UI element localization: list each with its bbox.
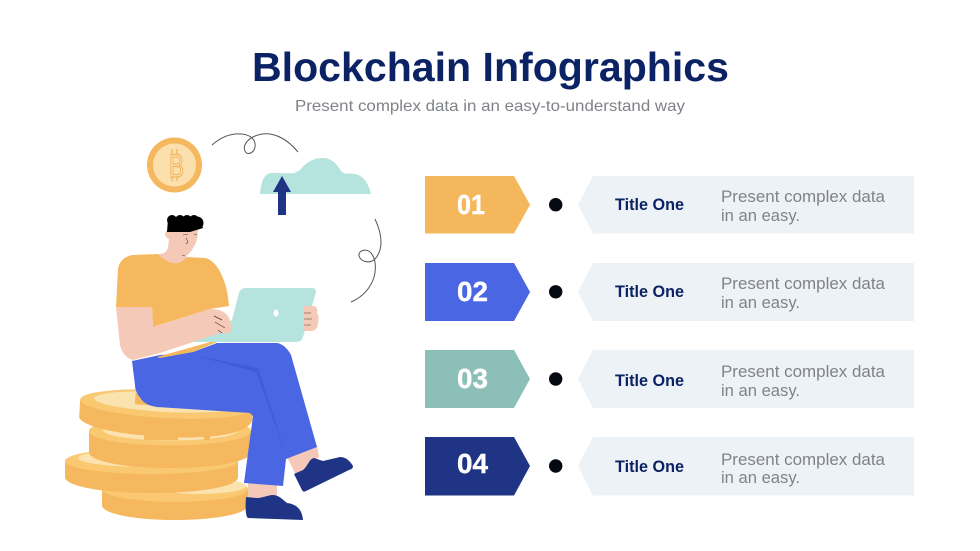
description 04: Present complex data	[721, 451, 886, 469]
connector dot 01	[549, 198, 562, 211]
icon: bitcoin coin	[147, 138, 202, 192]
person: lower shoe	[246, 495, 303, 520]
text panel 04	[578, 437, 914, 496]
person: trousers	[132, 343, 317, 486]
row 03	[425, 350, 914, 408]
number tag 02	[425, 263, 530, 321]
icon: cloud	[260, 158, 371, 194]
connector dot 02	[549, 285, 562, 298]
decorative curve: right loop	[351, 219, 381, 302]
number 04: 04	[457, 448, 488, 479]
description 02: Present complex data	[721, 275, 886, 293]
connector dot 03	[549, 372, 562, 386]
row 02	[425, 263, 914, 321]
person: front ankle skin	[286, 445, 319, 475]
person: finger lines	[214, 316, 225, 333]
decorative curve: top loop	[212, 134, 298, 154]
number tag 04	[425, 437, 530, 496]
number tag 01	[425, 176, 530, 234]
coin 1	[78, 386, 254, 442]
person: neck and face	[158, 229, 198, 263]
person: T-shirt	[116, 254, 229, 327]
subtitle: Present complex data in an easy-to-understand way	[295, 98, 685, 115]
row 01	[425, 176, 914, 234]
coin 4	[102, 476, 248, 520]
coin 3	[65, 448, 238, 493]
number 03: 03	[457, 363, 488, 394]
description 02: in an easy.	[721, 294, 800, 312]
person: shirt hem	[157, 342, 217, 358]
text panel 02	[578, 263, 914, 321]
description 01: Present complex data	[721, 188, 886, 206]
coin 2	[89, 416, 251, 468]
person: arm and hand	[116, 307, 232, 360]
person: hair	[167, 215, 204, 232]
illustration: person on coin stack	[65, 134, 381, 520]
title: Blockchain Infographics	[252, 44, 729, 90]
description 03: in an easy.	[721, 382, 800, 400]
text panel 03	[578, 350, 914, 408]
description 04: in an easy.	[721, 469, 800, 487]
person: facial details	[182, 234, 197, 256]
description 03: Present complex data	[721, 363, 886, 381]
person: laptop	[187, 288, 316, 342]
heading 01: Title One	[615, 196, 684, 214]
person: raised shoe	[294, 457, 353, 492]
icon: upload arrow	[273, 176, 291, 215]
row 04	[425, 437, 914, 496]
number 02: 02	[457, 276, 488, 307]
coin stack	[65, 386, 254, 520]
heading 02: Title One	[615, 283, 684, 301]
person: trouser fold shading	[193, 355, 286, 455]
connector dot 04	[549, 459, 562, 473]
description 01: in an easy.	[721, 207, 800, 225]
laptop logo dot	[274, 310, 278, 316]
person: far hand	[303, 306, 319, 331]
text panel 01	[578, 176, 914, 234]
person: far hand finger lines	[304, 313, 312, 325]
heading 04: Title One	[615, 458, 684, 476]
heading 03: Title One	[615, 372, 684, 390]
number 01: 01	[457, 189, 485, 220]
icon: bitcoin coin: B	[169, 148, 184, 184]
number tag 03	[425, 350, 530, 408]
person: back leg skin	[248, 480, 277, 498]
